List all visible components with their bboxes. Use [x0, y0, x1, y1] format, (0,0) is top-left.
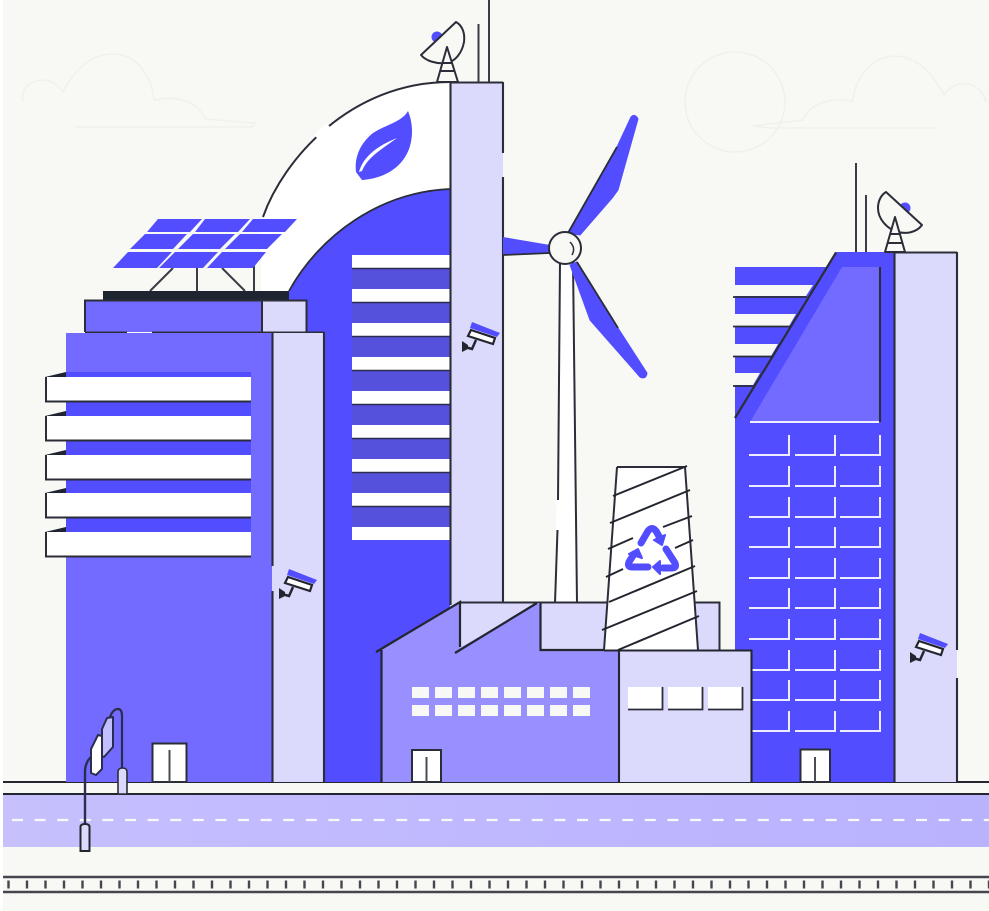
door	[412, 750, 441, 782]
antennas: right tower	[856, 163, 866, 252]
factory	[376, 466, 752, 782]
hall windows	[412, 687, 590, 716]
window strips	[733, 285, 813, 386]
cloud: right	[753, 56, 986, 128]
side wall	[272, 332, 324, 782]
roof outlines	[376, 602, 619, 782]
building: left	[45, 219, 324, 782]
sloped glass front	[735, 252, 894, 432]
blade: up	[568, 115, 638, 235]
blade: left	[503, 237, 550, 255]
blade: right	[570, 262, 647, 378]
security camera: middle tower	[462, 322, 500, 352]
main body	[66, 333, 272, 782]
hub	[549, 232, 581, 264]
building: middle curved tower	[261, 82, 503, 782]
main body	[735, 252, 894, 782]
icon: leaf	[356, 111, 412, 180]
annex	[604, 650, 752, 782]
security camera: right tower	[910, 633, 948, 663]
side tower	[450, 82, 503, 610]
back wall	[460, 602, 720, 650]
wind turbine	[503, 115, 647, 603]
window strips	[352, 255, 450, 540]
main hall	[381, 602, 619, 782]
building: right	[733, 252, 957, 782]
door	[800, 750, 830, 782]
roof outlines	[263, 82, 450, 217]
sun outline	[685, 52, 785, 152]
cloud: left	[23, 54, 255, 127]
road	[3, 795, 989, 847]
side wall	[894, 252, 957, 782]
street lamp: front	[80, 735, 102, 851]
solar panel mounts	[150, 265, 254, 291]
window grid	[749, 435, 880, 731]
satellite dish: right tower	[878, 192, 922, 252]
security camera: left building	[279, 569, 317, 599]
chimney	[602, 466, 699, 650]
ground and pavement lines	[3, 782, 989, 794]
icon: recycling symbol	[628, 528, 676, 574]
antennas: middle tower	[478, 0, 489, 82]
solar panel	[113, 219, 297, 268]
rooftop block	[85, 300, 324, 332]
satellite dish: middle tower	[421, 22, 464, 82]
railway track	[3, 877, 989, 892]
white curved roof	[261, 82, 450, 291]
door	[152, 744, 186, 782]
curved blue body	[289, 189, 450, 782]
street lamp: rear	[102, 709, 127, 794]
dark roof slab	[103, 291, 289, 300]
mast	[555, 262, 577, 603]
balcony strips	[45, 372, 251, 556]
